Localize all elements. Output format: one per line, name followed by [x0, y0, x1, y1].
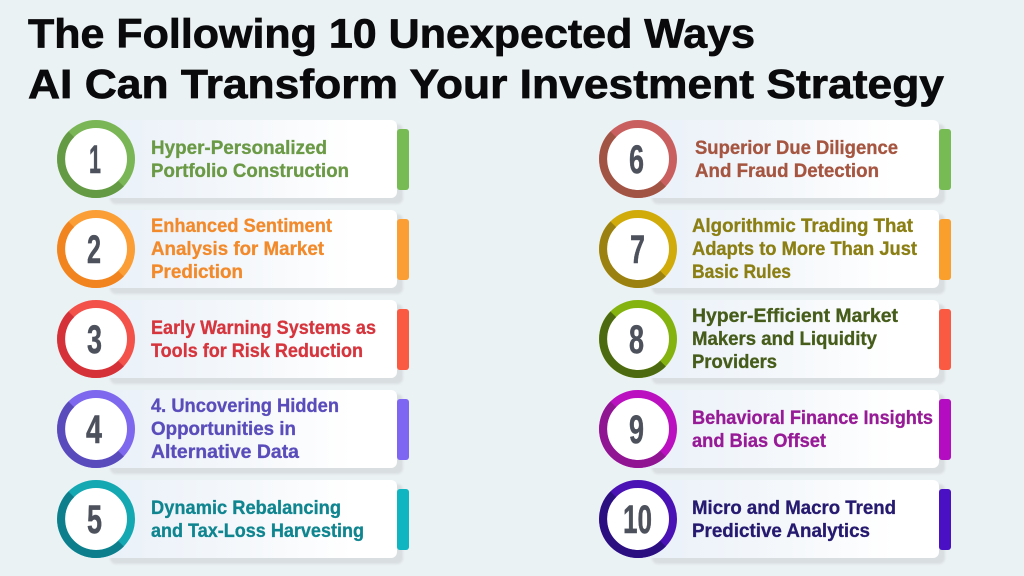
item 1: Hyper-Personalized Portfolio Construction: 1: [89, 138, 101, 182]
item 5: Dynamic Rebalancing: and Tax-Loss Harvesting: [151, 521, 364, 542]
item 3: Early Warning Systems: [61, 300, 409, 384]
item 10: Micro and Macro Trend: [603, 480, 951, 564]
item 7: Algorithmic Trading: [603, 210, 951, 294]
item 5: Dynamic Rebalancing: 5: [87, 498, 102, 542]
item 3: Early Warning Systems: Tools for Risk Reduction: [151, 341, 363, 362]
item 7: Algorithmic Trading: Adapts to More Than Just: [692, 239, 918, 260]
item 4: Uncovering Hidden Opportunities: Alternative Data: [151, 442, 299, 463]
item 4: Uncovering Hidden Opportunities: [61, 390, 409, 474]
item 7: Algorithmic Trading: Algorithmic Trading That: [692, 216, 914, 237]
item 1: Hyper-Personalized Portfolio Construction: [61, 120, 409, 204]
item 2: Enhanced Sentiment Analysis: 2: [87, 228, 101, 272]
item 6: Superior Due Diligence: Superior Due Diligence: [695, 138, 898, 159]
item 3: Early Warning Systems: Early Warning Systems as: [151, 318, 376, 339]
item 3: Early Warning Systems: 3: [87, 318, 102, 362]
item 9: Behavioral Finance Insights: Behavioral Finance Insights: [692, 408, 933, 429]
item 2: Enhanced Sentiment Analysis: Enhanced Sentiment: [151, 216, 333, 237]
item 6: Superior Due Diligence: 6: [629, 138, 644, 182]
item 7: Algorithmic Trading: Basic Rules: [692, 262, 791, 283]
item 7: Algorithmic Trading: 7: [630, 228, 645, 272]
item 5: Dynamic Rebalancing: [61, 480, 409, 564]
item 8: Hyper-Efficient Market Makers: Providers: [692, 352, 777, 373]
item 8: Hyper-Efficient Market Makers: Hyper-Efficient Market: [692, 306, 899, 327]
title: The Following 10 Unexpected Ways: [28, 10, 755, 56]
item 1: Hyper-Personalized Portfolio Construction: Portfolio Construction: [151, 161, 349, 182]
item 9: Behavioral Finance Insights: [603, 390, 951, 474]
item 6: Superior Due Diligence: And Fraud Detection: [695, 161, 879, 182]
item 2: Enhanced Sentiment Analysis: Prediction: [151, 262, 243, 283]
item 2: Enhanced Sentiment Analysis: Analysis for Market: [151, 239, 325, 260]
item 8: Hyper-Efficient Market Makers: [603, 300, 951, 384]
title: AI Can Transform Your Investment Strategy: [28, 61, 944, 107]
title: [28, 10, 944, 107]
item 9: Behavioral Finance Insights: 9: [629, 408, 644, 452]
item 8: Hyper-Efficient Market Makers: Makers and Liquidity: [692, 329, 877, 350]
item 6: Superior Due Diligence: [603, 120, 951, 204]
item 4: Uncovering Hidden Opportunities: 4: [86, 408, 103, 452]
item 10: Micro and Macro Trend: 10: [623, 498, 652, 542]
item 4: Uncovering Hidden Opportunities: 4. Uncovering Hidden: [151, 396, 339, 417]
item 4: Uncovering Hidden Opportunities: Opportunities in: [151, 419, 296, 440]
item 5: Dynamic Rebalancing: Dynamic Rebalancing: [151, 498, 341, 519]
item 1: Hyper-Personalized Portfolio Construction: Hyper-Personalized: [151, 138, 327, 159]
item 2: Enhanced Sentiment Analysis: [61, 210, 409, 294]
item 9: Behavioral Finance Insights: and Bias Offset: [692, 431, 827, 452]
item 10: Micro and Macro Trend: Micro and Macro Trend: [692, 498, 896, 519]
item 10: Micro and Macro Trend: Predictive Analytics: [692, 521, 870, 542]
item 8: Hyper-Efficient Market Makers: 8: [629, 318, 644, 362]
